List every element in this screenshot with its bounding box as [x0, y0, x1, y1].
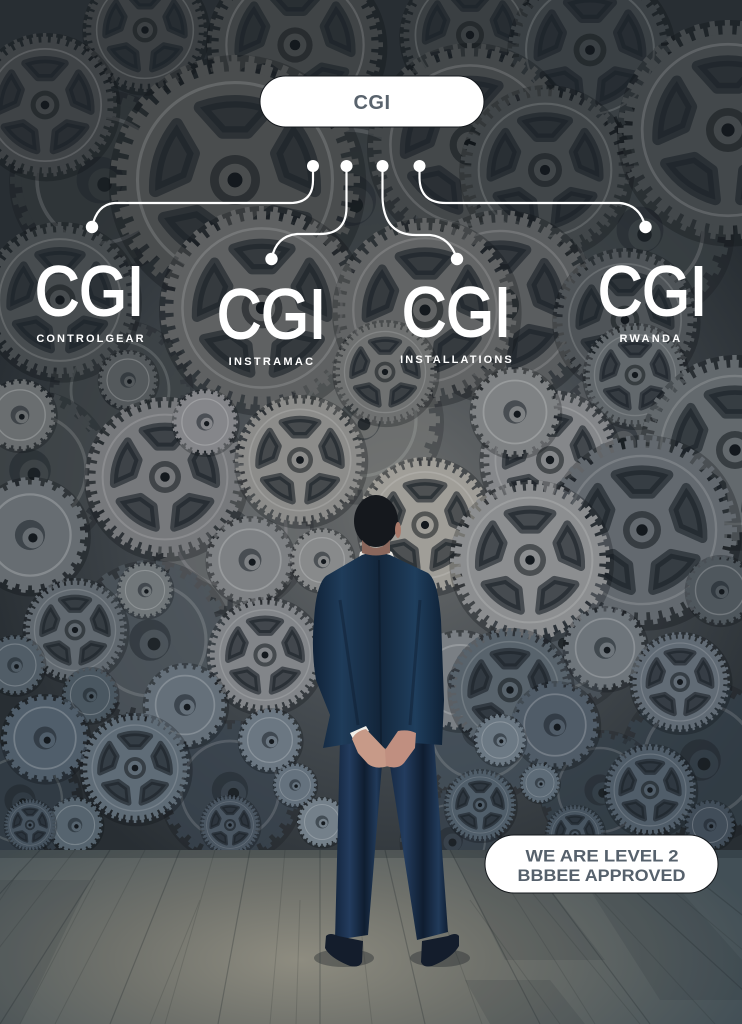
connector lines and dots — [86, 160, 652, 265]
top pill: CGI: CGI — [353, 92, 391, 114]
top pill: CGI — [260, 76, 484, 127]
logo: CGI Instramac: CGI — [217, 275, 326, 353]
logo: CGI Instramac: INSTRAMAC — [229, 356, 315, 368]
bottom pill: BBBEE level: BBBEE APPROVED — [518, 867, 686, 885]
logo: CGI Controlgear: CONTROLGEAR — [36, 333, 146, 345]
logo: CGI Controlgear: CGI — [35, 252, 144, 330]
logo: CGI Installations: CGI — [402, 273, 511, 351]
logo: CGI Rwanda: CGI — [598, 252, 707, 330]
bottom pill: BBBEE level — [485, 835, 718, 893]
bottom pill: BBBEE level: WE ARE LEVEL 2 — [526, 848, 678, 866]
logo: CGI Installations: INSTALLATIONS — [400, 354, 514, 366]
wooden floor — [0, 850, 742, 1024]
businessman from behind — [313, 495, 470, 967]
logo: CGI Rwanda: RWANDA — [619, 333, 683, 345]
